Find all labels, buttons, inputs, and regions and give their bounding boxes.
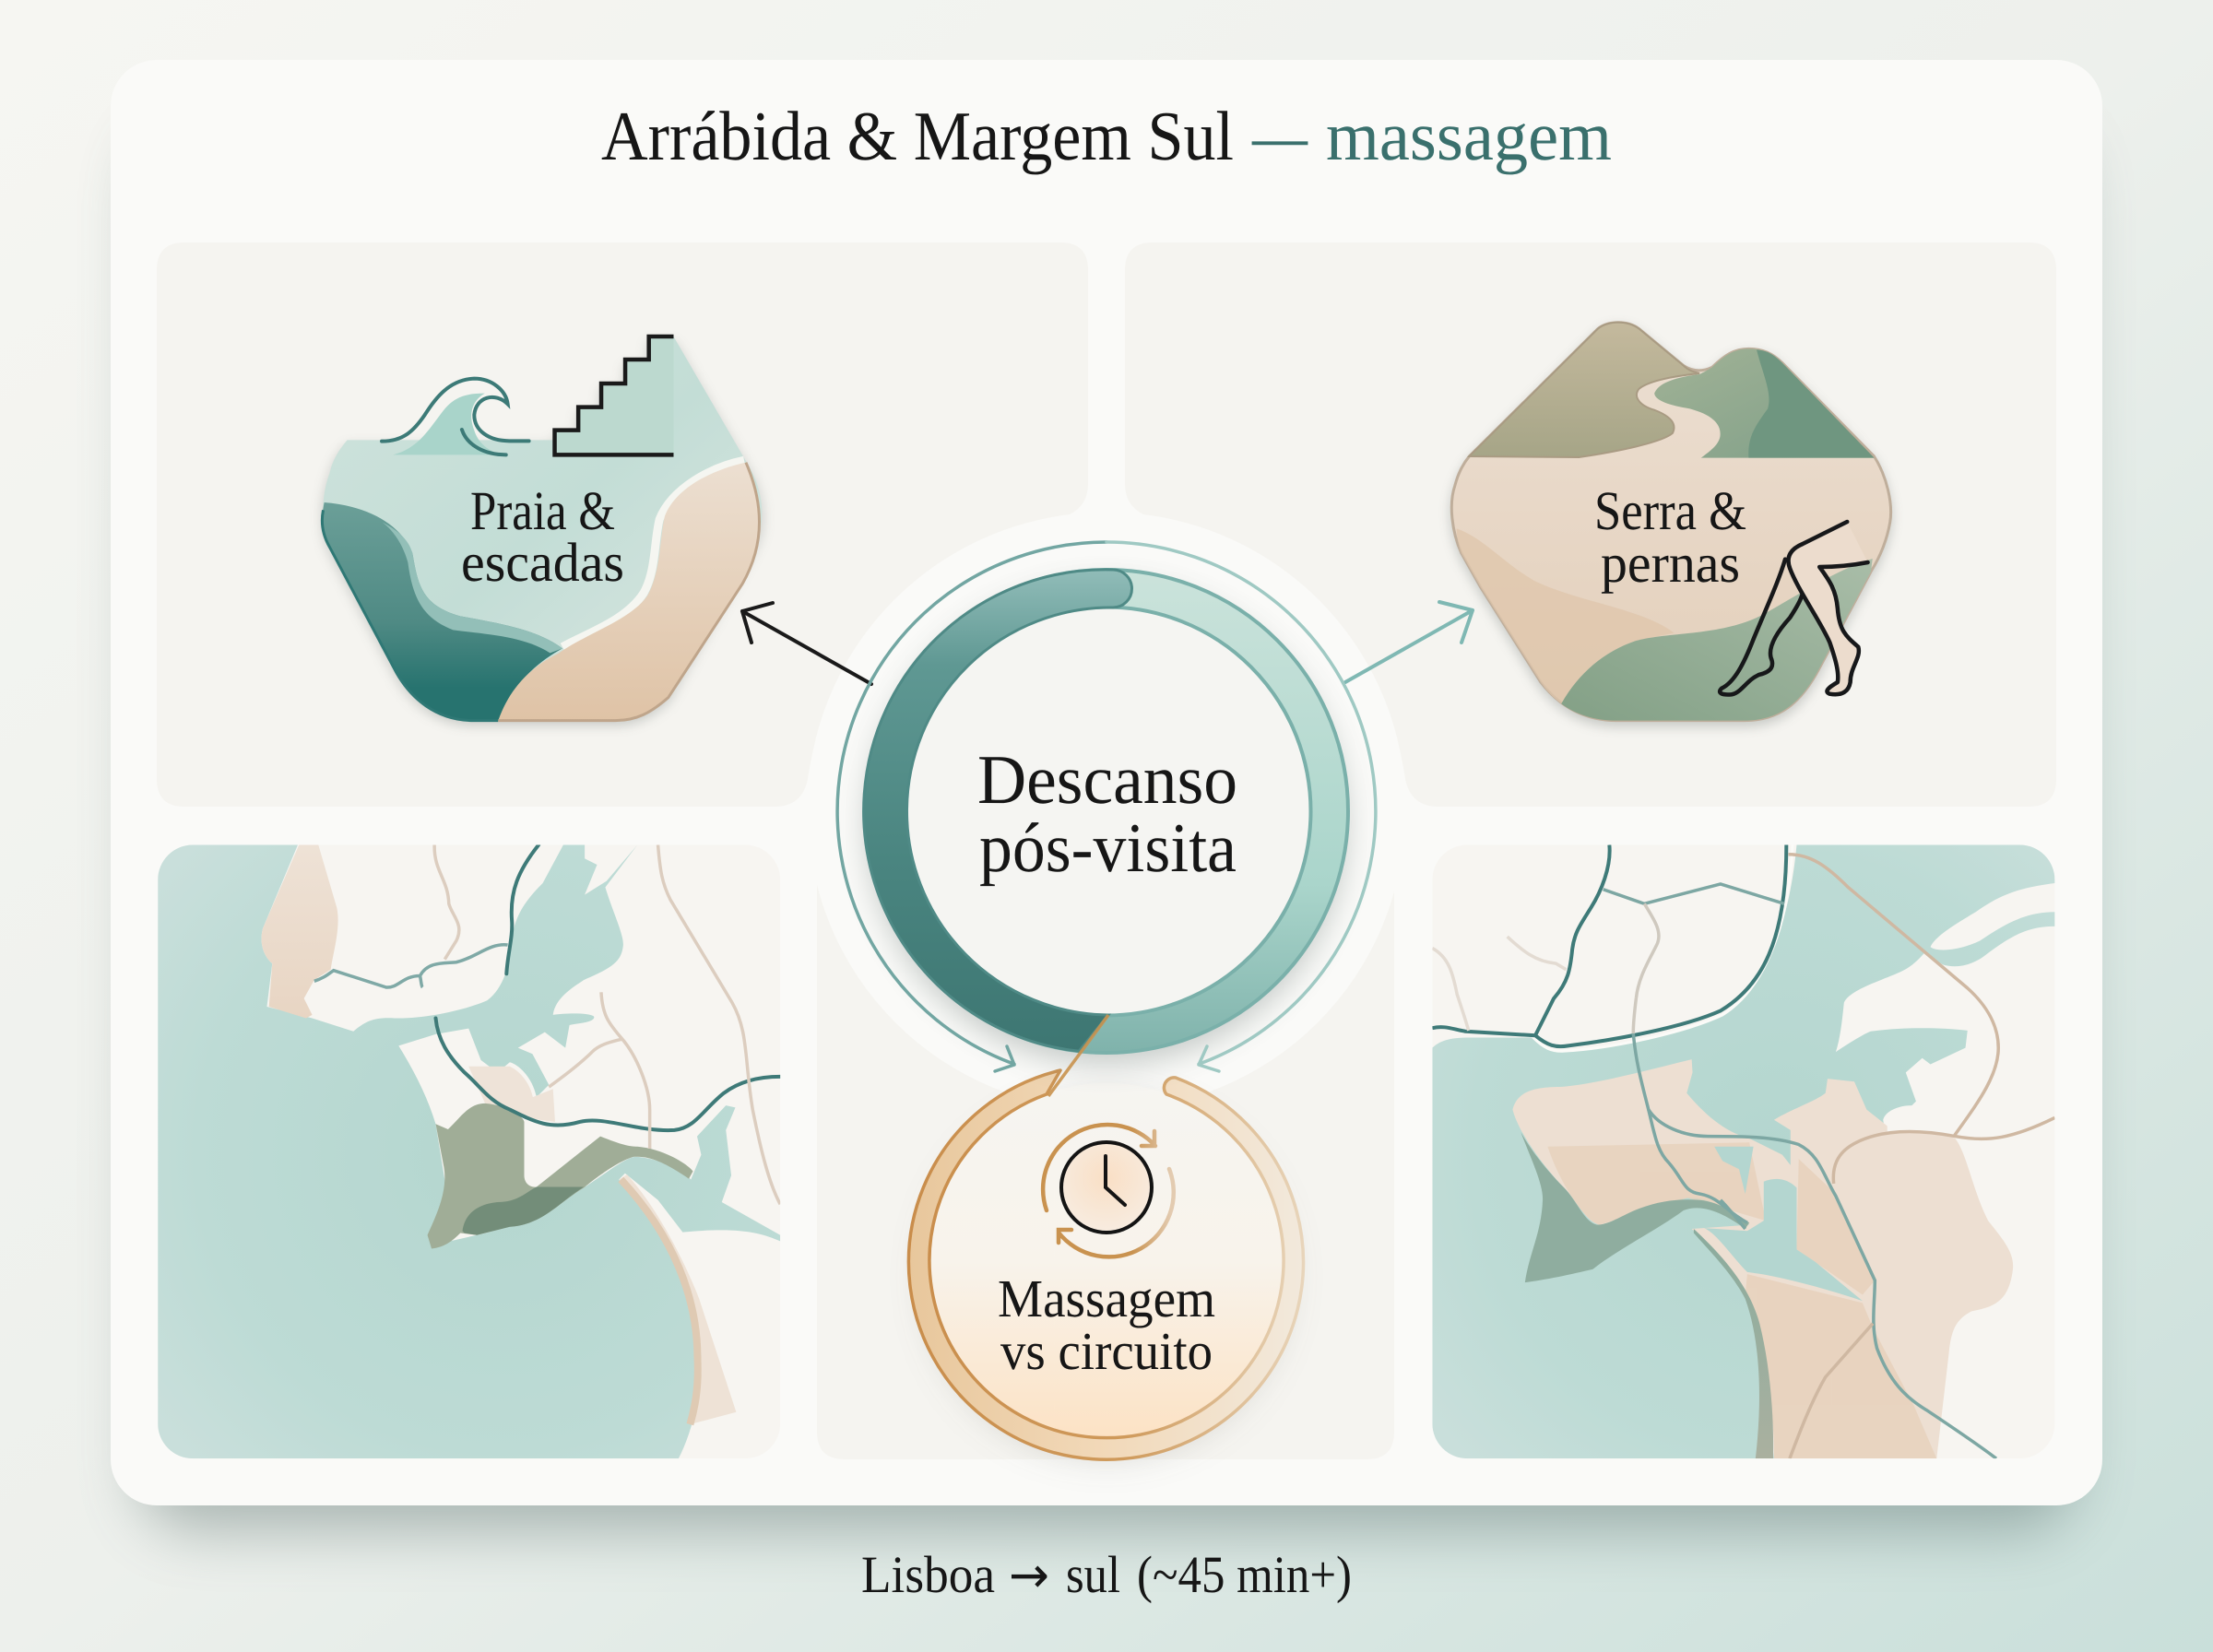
title	[601, 98, 1612, 175]
map left: beach strip	[619, 1174, 736, 1424]
card shadow	[138, 129, 2075, 1530]
praia: shape with shadow	[323, 336, 762, 721]
praia: stairs outline	[555, 336, 673, 454]
bottom ring: band	[908, 1070, 1303, 1459]
hub: ring shadow	[867, 584, 1346, 1064]
serra label: pernas	[1601, 533, 1740, 594]
connector: orange line	[1048, 1015, 1108, 1096]
praia: deep water	[323, 502, 562, 721]
praia: sand edge	[498, 463, 760, 721]
panel: top left	[157, 242, 1088, 807]
map right: inlets	[1704, 1147, 1863, 1301]
massagem label: vs circuito	[1000, 1321, 1213, 1381]
praia: sand	[498, 463, 760, 721]
praia label: escadas	[461, 532, 624, 593]
hub: outer thin ring right	[1106, 542, 1376, 1071]
map right: coast band	[1694, 1229, 1773, 1458]
praia label	[461, 480, 624, 593]
praia: foam line	[562, 460, 744, 647]
map left: inland sand	[468, 1067, 555, 1122]
hexagon: serra & pernas	[1451, 323, 1891, 721]
praia: sea body	[323, 336, 762, 721]
map right: tan roads	[1789, 855, 2054, 1458]
panel: top right	[1125, 242, 2056, 807]
serra label: Serra &	[1594, 480, 1746, 541]
icon: legs	[1720, 522, 1868, 694]
arrow: to serra	[1345, 602, 1473, 682]
serra: tan slope	[1457, 528, 1675, 703]
title: massagem	[1326, 98, 1612, 175]
footer caption	[861, 1546, 1352, 1604]
hub: outer thin ring left	[837, 542, 1106, 1071]
serra label	[1594, 480, 1746, 594]
serra: left mountain	[1469, 323, 1699, 457]
serra: green foreground	[1561, 559, 1873, 721]
hexagon: praia & escadas	[322, 336, 762, 721]
cycle arrows	[1043, 1125, 1174, 1257]
serra: base shape	[1451, 323, 1891, 721]
centre hub: descanso pós-visita	[837, 542, 1376, 1071]
map: left	[158, 845, 780, 1458]
centre label: pós-visita	[979, 809, 1237, 887]
back leg	[1720, 560, 1803, 694]
massagem label: Massagem	[998, 1268, 1215, 1328]
map right: main roads	[1432, 845, 1786, 1046]
map right: water	[1432, 845, 2054, 1458]
map right: white shore	[1533, 909, 1786, 1053]
hub: edge lines	[865, 570, 1348, 1053]
map left: minor roads	[434, 845, 780, 1204]
praia label: Praia &	[470, 480, 615, 541]
centre label: Descanso	[977, 741, 1237, 819]
title: —	[1251, 98, 1308, 175]
map right: darker sand	[1547, 1142, 1936, 1458]
serra: base beige	[1451, 323, 1891, 721]
centre label	[977, 741, 1237, 887]
map: right	[1432, 845, 2054, 1458]
bottom ring: massagem vs circuito	[908, 1070, 1303, 1459]
map left: dark ridge	[463, 1187, 584, 1235]
praia: stairs fill	[555, 336, 673, 454]
map left: secondary road	[314, 945, 508, 987]
map right: secondary roads	[1604, 884, 1996, 1458]
clock face	[1061, 1142, 1152, 1233]
praia: wave fill	[393, 394, 503, 454]
praia: pale water band	[383, 523, 562, 653]
serra: right mountain	[1654, 348, 1874, 458]
icon: clock	[1043, 1125, 1174, 1257]
serra: shaded mountain side	[1748, 349, 1874, 458]
footer caption: sul	[1066, 1546, 1120, 1604]
bottom ring: disc	[928, 1083, 1285, 1441]
footer caption: Lisboa	[861, 1546, 995, 1604]
praia: wave outline	[382, 379, 529, 454]
map left: coast edge	[621, 1179, 698, 1424]
praia: teal edge	[322, 510, 498, 721]
map left: green hills	[428, 1103, 693, 1248]
footer caption: (~45 min+)	[1137, 1546, 1352, 1604]
front leg	[1788, 522, 1868, 694]
main card	[111, 60, 2102, 1505]
hub: light half ring	[883, 588, 1330, 1034]
map right: grey roads	[1432, 903, 1659, 1033]
hub: dark half ring	[864, 570, 1132, 1051]
map left: main roads	[436, 845, 780, 1130]
arrow: to praia	[742, 603, 871, 684]
footer caption: →	[1009, 1546, 1049, 1604]
massagem label	[998, 1268, 1215, 1381]
hub: inner edge line	[902, 607, 1311, 1016]
centre halo	[808, 513, 1405, 1110]
map left: water	[158, 845, 780, 1458]
panel: bottom centre	[817, 876, 1394, 1459]
clock hands	[1106, 1156, 1125, 1205]
title: Arrábida & Margem Sul	[601, 98, 1234, 175]
map left: cape sand	[262, 845, 338, 1018]
map right: green wedge	[1521, 1132, 1749, 1282]
map right: peninsula land	[1512, 1059, 2013, 1458]
